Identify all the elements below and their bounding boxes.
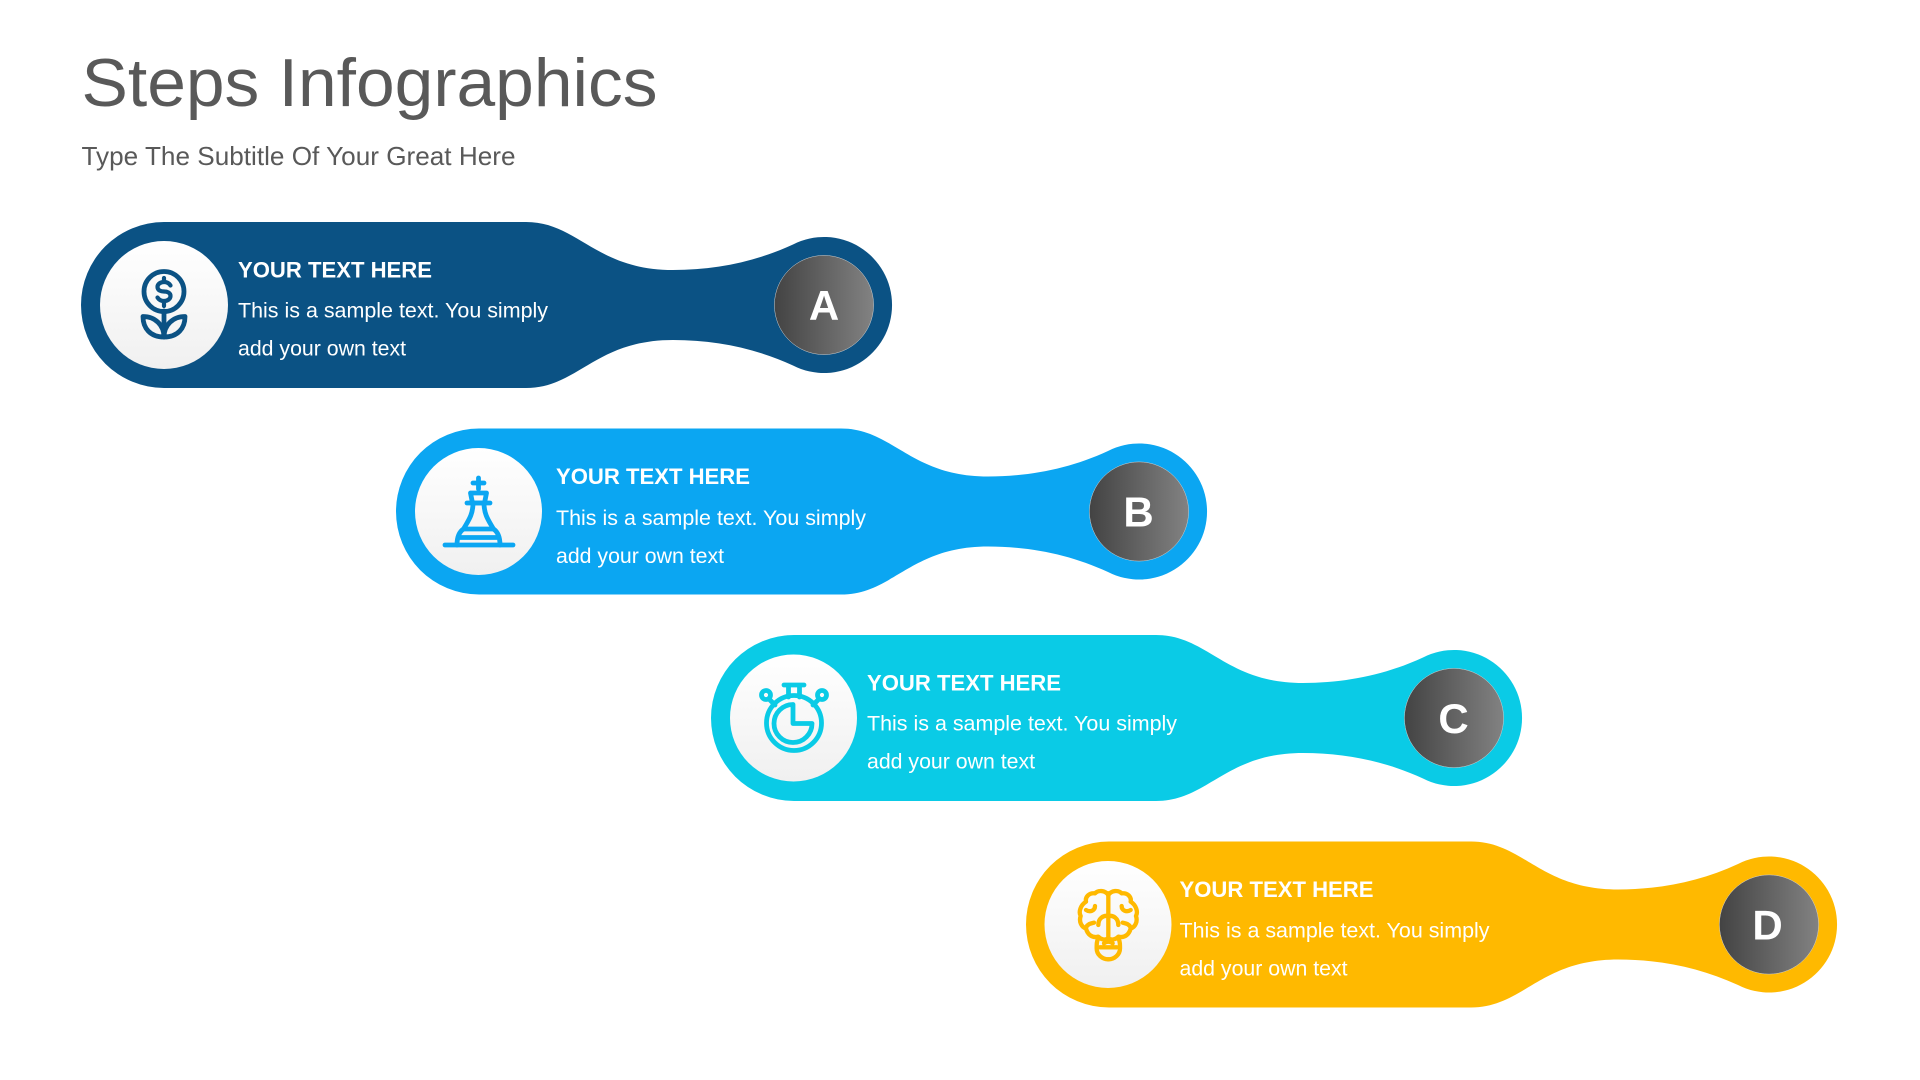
step A icon disc	[100, 241, 228, 369]
step B paddle shape	[396, 428, 1207, 594]
step D badge: D	[1752, 902, 1783, 948]
step A heading: YOUR TEXT HERE	[238, 258, 432, 282]
step A badge: A	[809, 282, 839, 329]
step C body text: This is a sample text. You simply	[867, 712, 1178, 736]
step C heading: YOUR TEXT HERE	[867, 670, 1061, 696]
step C icon disc	[730, 654, 857, 782]
step D icon disc	[1044, 861, 1172, 988]
step D badge	[1719, 875, 1819, 974]
step D body text line 2: add your own text	[1180, 958, 1348, 980]
step D paddle shape	[1026, 842, 1837, 1008]
step B body text line 2: add your own text	[556, 545, 724, 568]
step A body text line 2: add your own text	[238, 338, 406, 360]
step C paddle shape	[711, 635, 1522, 801]
step B body text: This is a sample text. You simply	[556, 507, 867, 530]
step C body text line 2: add your own text	[867, 750, 1035, 774]
panel: step A	[81, 222, 892, 388]
step D body text: This is a sample text. You simply	[1180, 920, 1490, 942]
step B icon disc	[415, 448, 542, 575]
step A badge	[774, 255, 874, 355]
icon: brain bulb	[1080, 891, 1137, 959]
icon: stopwatch	[762, 685, 826, 750]
title: Steps Infographics	[82, 45, 658, 121]
step D heading: YOUR TEXT HERE	[1180, 877, 1374, 902]
subtitle: Type The Subtitle Of Your Great Here	[82, 141, 516, 171]
step C badge: C	[1438, 695, 1469, 742]
panel: step D	[1026, 842, 1837, 1008]
step B heading: YOUR TEXT HERE	[556, 464, 750, 489]
icon: chess king	[445, 478, 513, 545]
step C badge	[1404, 668, 1504, 768]
step A paddle shape	[81, 222, 892, 388]
step B badge	[1089, 462, 1189, 561]
panel: step C	[711, 635, 1522, 801]
icon: money flower	[143, 272, 185, 337]
step B badge: B	[1123, 488, 1154, 536]
panel: step B	[396, 428, 1207, 594]
step A body text: This is a sample text. You simply	[238, 300, 549, 322]
